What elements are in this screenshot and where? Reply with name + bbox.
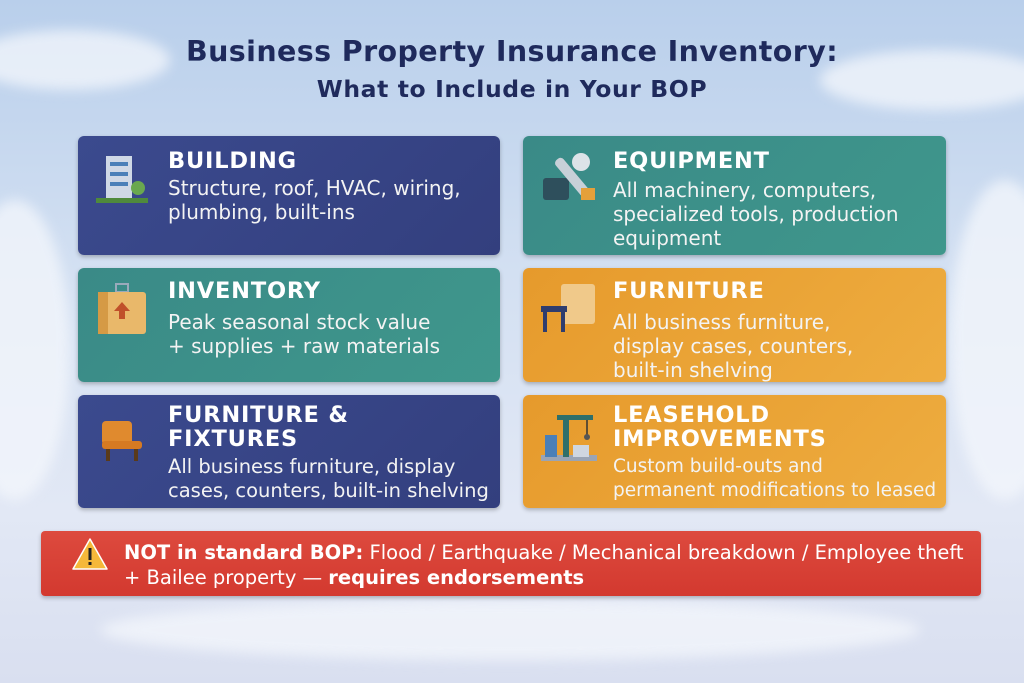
- panel: furniture and fixtures: FIXTURES: [168, 426, 298, 452]
- panel: furniture: All business furniture,: [613, 310, 830, 334]
- panel: leasehold improvements: permanent modifications to leased: [613, 480, 936, 501]
- title: Business Property Insurance Inventory:: [186, 35, 838, 68]
- panel: equipment: EQUIPMENT: [613, 148, 770, 174]
- callout: exclusions: [41, 531, 981, 596]
- panel: inventory: INVENTORY: [168, 278, 321, 304]
- panel: leasehold improvements: IMPROVEMENTS: [613, 426, 827, 452]
- panel: equipment: All machinery, computers,: [613, 178, 876, 202]
- icon: crane: [541, 415, 597, 461]
- panel: furniture: [523, 268, 946, 382]
- panel: equipment: [523, 136, 946, 255]
- panel: inventory: Peak seasonal stock value: [168, 310, 430, 334]
- panel: furniture and fixtures: cases, counters, built-in shelving: [168, 479, 489, 502]
- subtitle: What to Include in Your BOP: [317, 75, 707, 103]
- icon: box: [98, 283, 146, 334]
- icon: wrench: [543, 153, 595, 200]
- callout text: [124, 541, 964, 589]
- icon: warning: [72, 538, 108, 570]
- icon: armchair: [102, 421, 142, 461]
- panel: leasehold improvements: [523, 395, 946, 508]
- panel: equipment: specialized tools, production: [613, 202, 899, 226]
- panel: furniture and fixtures: FURNITURE &: [168, 402, 349, 428]
- panel: inventory: [78, 268, 500, 382]
- panel: building: [78, 136, 500, 255]
- panel: leasehold improvements: Custom build-outs and: [613, 456, 823, 477]
- callout text: NOT in standard BOP: Flood / Earthquake / Mechanical breakdown / Employee theft: [124, 541, 964, 564]
- panel: furniture: FURNITURE: [613, 278, 765, 304]
- icon: building: [96, 156, 148, 203]
- panel: inventory: + supplies + raw materials: [168, 334, 440, 358]
- panel: leasehold improvements: LEASEHOLD: [613, 402, 770, 428]
- panel: furniture and fixtures: All business furniture, display: [168, 455, 455, 478]
- panel: building: BUILDING: [168, 148, 297, 174]
- panel: furniture: built-in shelving: [613, 358, 773, 382]
- panel: building: Structure, roof, HVAC, wiring,: [168, 176, 461, 200]
- icon: chair and box: [541, 284, 595, 332]
- callout text: + Bailee property — requires endorsements: [124, 566, 584, 589]
- panel: furniture: display cases, counters,: [613, 334, 853, 358]
- panel: building: plumbing, built-ins: [168, 200, 355, 224]
- panel: furniture and fixtures: [78, 395, 500, 508]
- panel: equipment: equipment: [613, 226, 721, 250]
